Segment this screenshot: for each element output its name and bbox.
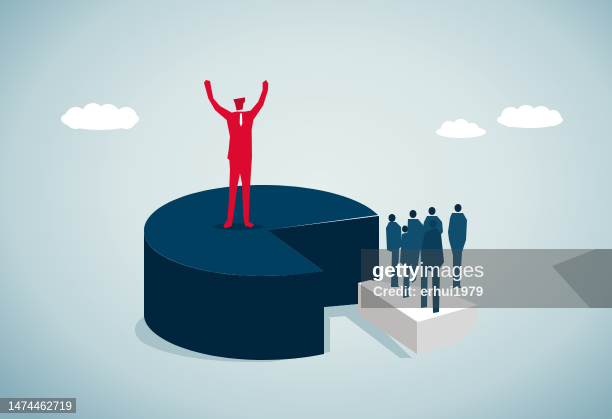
person 5 front	[421, 220, 444, 313]
watermark shard decoration	[552, 249, 612, 308]
image id tag	[0, 398, 76, 413]
wedge floor shadow	[324, 302, 412, 358]
pie chart	[144, 185, 379, 360]
slice top	[358, 280, 478, 322]
tie	[240, 113, 242, 127]
cloud left	[61, 103, 139, 130]
slice right side	[417, 305, 478, 354]
wedge inner wall	[267, 216, 379, 307]
slice left side	[358, 283, 417, 354]
red figure with raised arms	[204, 80, 268, 230]
pie top	[144, 185, 378, 276]
image id tag: 1474462719	[8, 401, 72, 413]
person 4	[420, 207, 443, 308]
watermark credit: Credit: erhui1979	[373, 284, 483, 299]
person 1	[386, 214, 402, 287]
head	[233, 97, 245, 111]
cloud middle	[436, 119, 486, 138]
watermark band	[361, 249, 612, 308]
person 2 back	[400, 226, 414, 298]
white slice block	[358, 280, 478, 354]
person 3	[407, 210, 424, 283]
cloud right	[497, 105, 563, 128]
group of small business people	[386, 204, 467, 313]
watermark brand: gettyimages	[372, 259, 484, 282]
person 6	[448, 204, 467, 288]
pie side wall	[144, 216, 379, 360]
foot shadow	[213, 223, 263, 230]
pie shadow	[135, 316, 330, 362]
body	[204, 80, 268, 228]
